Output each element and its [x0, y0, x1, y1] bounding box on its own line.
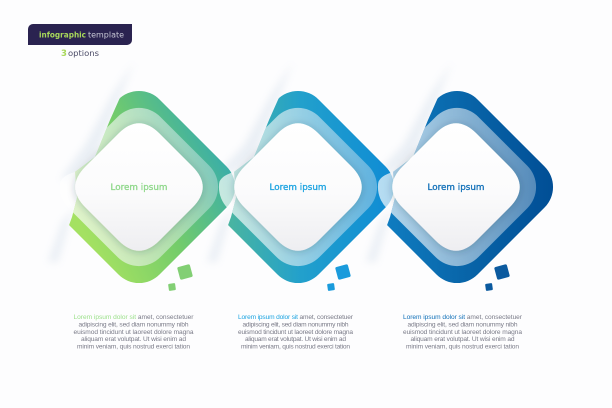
header badge — [28, 24, 132, 45]
header badge: infographic — [39, 30, 86, 40]
text block: option 3: minim veniam, quis nostrud exerci tation — [406, 344, 519, 350]
text block: option 1: euismod tincidunt ut laoreet dolore magna — [74, 329, 194, 336]
translucent middle layer — [66, 108, 218, 266]
soft swoosh shadows — [48, 62, 452, 262]
text block: option 2: minim veniam, quis nostrud exerci tation — [241, 344, 350, 350]
text block: option 3: euismod tincidunt ut laoreet dolore magna — [403, 329, 522, 336]
option 2: blue diamond — [218, 91, 394, 283]
subtitle: 3 options: options — [68, 49, 99, 58]
text block: option 1: minim veniam, quis nostrud exerci tation — [77, 344, 190, 350]
outer blue shape — [228, 91, 394, 283]
option 1: green diamond — [66, 91, 235, 283]
text block: option 3: adipiscing elit, sed diam nonummy nibh — [408, 322, 518, 328]
text block: option 1: Lorem ipsum dolor sit amet, consectetuer — [74, 314, 194, 321]
outer navy shape — [387, 91, 554, 283]
translucent middle layer — [378, 108, 536, 266]
text block: option 2: adipiscing elit, sed diam nonummy nibh — [242, 322, 349, 328]
text block: option 1 — [74, 314, 194, 350]
subtitle: 3 options: 3 — [61, 49, 67, 59]
text block: option 2: Lorem ipsum dolor sit amet, consectetuer — [238, 314, 354, 321]
label: Lorem ipsum — [110, 183, 168, 193]
text block: option 2: euismod tincidunt ut laoreet dolore magna — [238, 329, 353, 336]
subtitle: 3 options — [61, 49, 99, 59]
label: Lorem ipsum — [428, 183, 484, 193]
header badge: template — [88, 30, 124, 40]
text block: option 3: aliquam erat volutpat. Ut wisi enim ad — [410, 336, 515, 343]
outer green shape — [69, 91, 235, 283]
text block: option 3 — [403, 314, 523, 350]
option 3: navy diamond — [378, 91, 554, 283]
text block: option 2: aliquam erat volutpat. Ut wisi enim ad — [245, 336, 346, 343]
text block: option 1: aliquam erat volutpat. Ut wisi enim ad — [81, 336, 186, 343]
icon: green squares — [168, 264, 193, 291]
white center diamond — [392, 123, 520, 251]
white center diamond — [234, 123, 362, 251]
text block: option 1: adipiscing elit, sed diam nonummy nibh — [78, 322, 189, 328]
white center diamond — [75, 123, 203, 251]
label: Lorem ipsum — [270, 183, 326, 193]
text block: option 2 — [238, 314, 354, 350]
icon: navy squares — [485, 264, 510, 291]
icon: blue squares — [327, 264, 351, 291]
translucent middle layer — [218, 108, 378, 266]
text block: option 3: Lorem ipsum dolor sit amet, consectetuer — [403, 314, 523, 321]
